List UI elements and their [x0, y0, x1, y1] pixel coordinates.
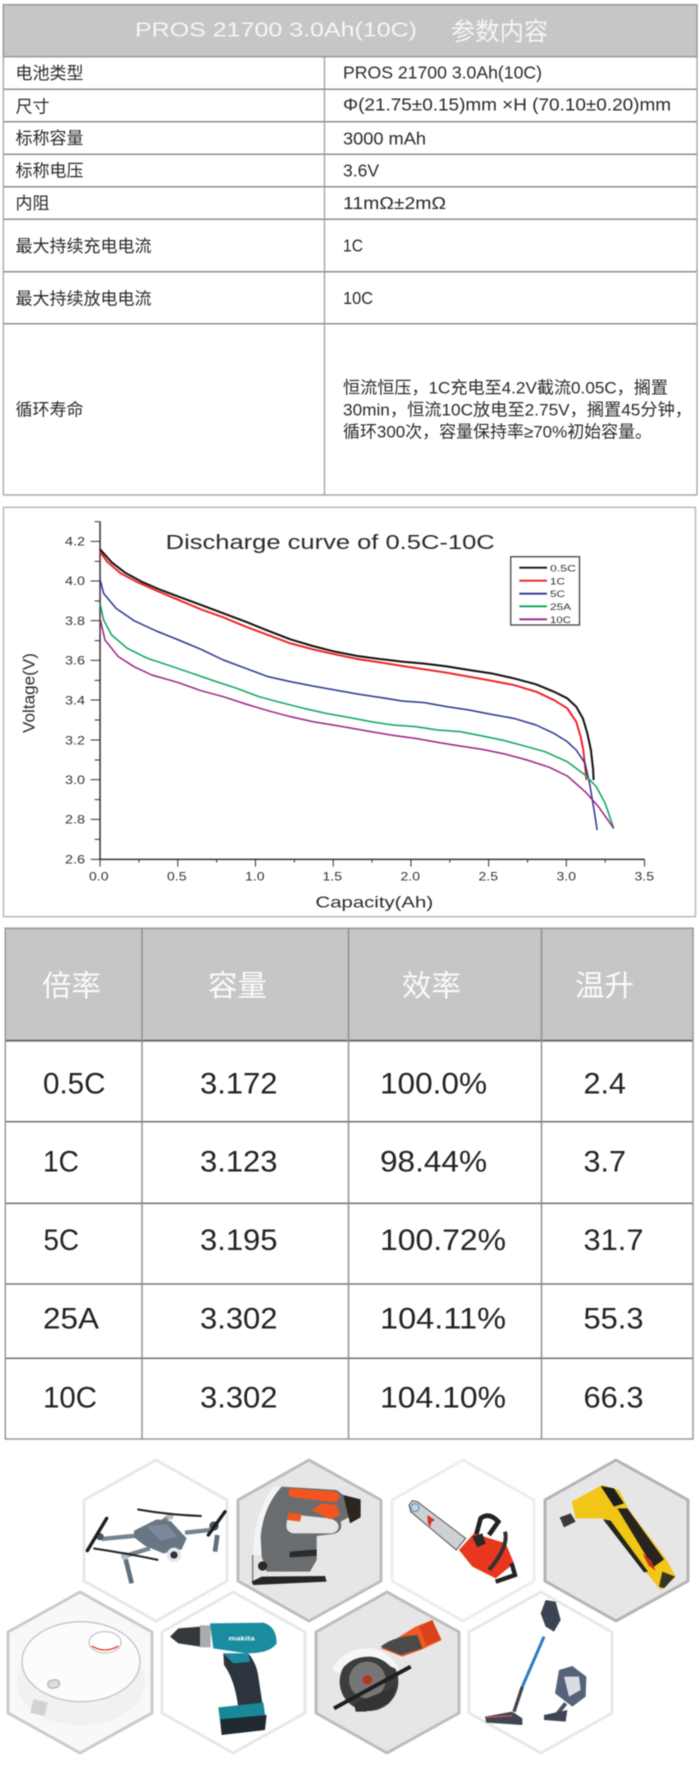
row: 0.5C	[43, 1067, 626, 1100]
row: 10C: 66.3	[584, 1381, 644, 1414]
hexagon: robot vacuum	[8, 1592, 152, 1753]
row: 5C: 100.72%	[380, 1224, 506, 1257]
row: 1C: 98.44%	[380, 1146, 487, 1179]
y axis tick labels: 3.2	[65, 734, 85, 748]
panel: rate performance table	[5, 928, 693, 1439]
hexagon: drone	[84, 1460, 227, 1621]
panel: discharge curve chart	[4, 507, 696, 917]
row: 5C	[44, 1224, 644, 1257]
row: 1C: 3.123	[200, 1146, 278, 1179]
y axis title: Voltage(V)	[20, 653, 38, 733]
hexagon: stick vacuum	[469, 1592, 612, 1753]
y axis tick labels: 2.8	[65, 812, 85, 826]
x axis tick labels: 0.5	[167, 870, 187, 884]
legend	[511, 557, 580, 625]
y axis tick labels: 3.6	[65, 654, 85, 668]
row: max continuous discharge current: 最大持续放电电流	[16, 290, 152, 308]
hexagon: cordless drill	[162, 1592, 305, 1753]
row: nominal capacity: 3000 mAh	[343, 128, 426, 148]
row: max continuous discharge current: 10C	[343, 288, 373, 308]
y axis tick labels	[65, 534, 85, 866]
row: battery type	[16, 62, 542, 83]
x axis tick labels: 2.0	[400, 870, 420, 884]
axes and ticks	[91, 522, 645, 867]
row: 5C: 3.195	[200, 1224, 278, 1257]
row: 0.5C: 3.172	[200, 1067, 278, 1100]
row: nominal voltage: 标称电压	[16, 162, 84, 180]
row: max continuous discharge current	[16, 288, 373, 308]
table grid lines	[5, 928, 693, 1439]
row: max continuous charge current: 最大持续充电电流	[16, 237, 152, 256]
row: 10C: 3.302	[200, 1381, 278, 1414]
panel: application hexagons	[8, 1460, 688, 1753]
row: 5C: 5C	[44, 1224, 79, 1257]
y axis tick labels: 3.0	[65, 773, 85, 787]
panel: parameter table	[3, 5, 697, 495]
row: nominal voltage: 3.6V	[343, 161, 380, 181]
legend: 0.5C	[550, 564, 577, 574]
row: cycle life: 循环寿命	[16, 400, 84, 420]
table header band: 效率	[402, 970, 461, 1003]
row: 0.5C: 2.4	[584, 1067, 626, 1100]
x axis tick labels: 0.0	[89, 870, 109, 884]
row: 25A: 55.3	[584, 1302, 644, 1335]
row: max continuous charge current: 1C	[343, 236, 363, 256]
row: battery type: 电池类型	[16, 64, 84, 83]
row: 25A	[43, 1302, 644, 1335]
x axis tick labels: 1.0	[245, 870, 265, 884]
y axis tick labels: 4.0	[65, 574, 85, 588]
legend: 10C	[550, 615, 572, 625]
row: 1C	[43, 1146, 626, 1179]
x axis tick labels	[89, 870, 654, 884]
hexagon: jigsaw	[238, 1460, 381, 1621]
table header band: 温升	[575, 970, 634, 1003]
table grid lines	[3, 57, 697, 495]
x axis tick labels: 1.5	[322, 870, 342, 884]
row: 25A: 25A	[43, 1302, 99, 1335]
x axis tick labels: 3.5	[634, 870, 654, 884]
row: cycle life: 循环300次，容量保持率≥70%初始容量。	[343, 422, 652, 442]
row: internal resistance	[16, 193, 446, 213]
row: 10C: 10C	[43, 1381, 97, 1414]
row: cycle life	[16, 378, 692, 442]
row: nominal capacity	[16, 128, 426, 148]
row: dimensions: Φ(21.75±0.15)mm ×H (70.10±0.20)mm	[343, 95, 671, 115]
row: 25A: 104.11%	[380, 1302, 506, 1335]
row: cycle life: 30min，恒流10C放电至2.75V，搁置45分钟，	[343, 400, 692, 420]
y axis tick labels: 2.6	[65, 852, 85, 866]
y axis tick labels: 4.2	[65, 534, 85, 548]
hexagon: circular saw	[316, 1592, 459, 1753]
hexagon: chainsaw	[392, 1460, 534, 1621]
row: cycle life: 恒流恒压，1C充电至4.2V截流0.05C，搁置	[343, 378, 668, 398]
row: 10C	[43, 1381, 644, 1414]
row: dimensions: 尺寸	[16, 98, 50, 116]
row: 0.5C: 0.5C	[43, 1067, 106, 1100]
row: dimensions	[16, 95, 671, 116]
table header band	[3, 5, 697, 57]
table header band: 倍率	[42, 970, 101, 1003]
legend: 25A	[550, 602, 571, 612]
discharge curves	[100, 549, 614, 830]
row: 0.5C: 100.0%	[380, 1067, 487, 1100]
row: 10C: 104.10%	[380, 1381, 506, 1414]
row: 5C: 31.7	[584, 1224, 644, 1257]
legend: 5C	[550, 589, 566, 599]
table header band: 参数内容	[451, 19, 548, 46]
chart title: Discharge curve of 0.5C-10C	[166, 532, 495, 554]
y axis tick labels: 3.8	[65, 614, 85, 628]
row: battery type: PROS 21700 3.0Ah(10C)	[343, 62, 542, 82]
row: nominal voltage	[16, 161, 380, 181]
x axis tick labels: 3.0	[556, 870, 576, 884]
row: nominal capacity: 标称容量	[16, 129, 84, 148]
hexagon: yellow right-angle tool	[545, 1460, 688, 1621]
legend: 1C	[550, 576, 566, 586]
table header band	[5, 928, 693, 1041]
table header band: PROS 21700 3.0Ah(10C)	[135, 20, 417, 42]
x axis tick labels: 2.5	[478, 870, 498, 884]
row: internal resistance: 内阻	[16, 194, 50, 213]
row: internal resistance: 11mΩ±2mΩ	[343, 193, 446, 213]
row: 1C: 1C	[43, 1146, 79, 1179]
row: 25A: 3.302	[200, 1302, 278, 1335]
row: 1C: 3.7	[584, 1146, 626, 1179]
table header band: 容量	[208, 970, 267, 1003]
x axis title: Capacity(Ah)	[316, 894, 433, 911]
row: max continuous charge current	[16, 236, 363, 256]
hexagon: cordless drill: makita	[229, 1635, 255, 1642]
y axis tick labels: 3.4	[65, 694, 85, 708]
